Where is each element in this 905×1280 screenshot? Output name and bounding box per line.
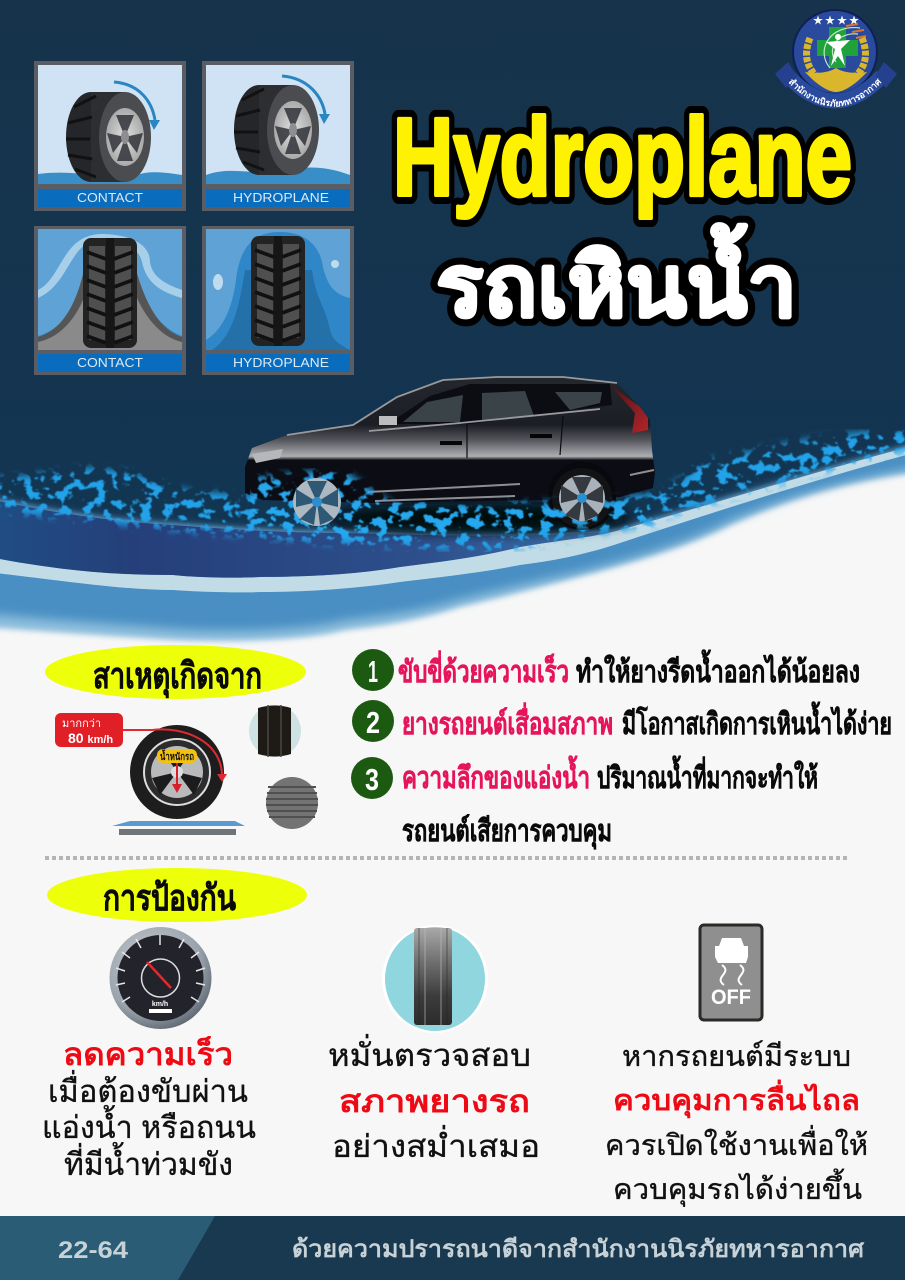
water surface <box>38 172 182 184</box>
lower trim <box>368 470 654 501</box>
icon: new tire tread <box>249 705 301 757</box>
prevention text 1: ที่มีน้ำท่วมขัง <box>64 1142 233 1182</box>
prevention text 3: ควบคุมรถได้ง่ายขึ้น <box>613 1168 862 1207</box>
heading: prevention: การป้องกัน <box>103 877 236 918</box>
navy header background <box>0 0 905 540</box>
prevention text 3: ควรเปิดใช้งานเพื่อให้ <box>605 1125 868 1162</box>
white figure <box>826 34 850 66</box>
car windows <box>403 391 602 422</box>
speed label: มากกว่า <box>62 718 101 730</box>
rear wheel <box>559 475 605 521</box>
water splash spray <box>0 429 905 552</box>
green cross <box>817 27 858 68</box>
icon: traction control off <box>700 925 762 1020</box>
panel: hydroplane side view <box>202 61 354 211</box>
prevention text 3: หากรถยนต์มีระบบ <box>622 1040 851 1073</box>
prevention text 3 <box>605 1040 868 1207</box>
cause 3: ปริมาณน้ำที่มากจะทำให้ <box>597 755 818 795</box>
front fender arch <box>280 474 358 500</box>
footer bar <box>0 1216 905 1280</box>
logo: air force safety center emblem <box>775 9 897 108</box>
rotation arrow <box>282 76 325 114</box>
label: hydroplane <box>206 354 350 372</box>
cause 1: 1 <box>368 654 378 689</box>
water wake layers <box>206 232 350 350</box>
icon: speedometer <box>110 927 212 1029</box>
label: contact <box>38 354 182 372</box>
weight arrow <box>176 763 178 786</box>
wave graphic <box>0 440 905 641</box>
water plate <box>112 821 245 826</box>
cause 1 <box>352 649 860 691</box>
prevention text 1 <box>42 1035 256 1182</box>
rear tyre <box>552 468 612 528</box>
icon: tire speed diagram <box>55 713 245 835</box>
icon: tire on teal <box>382 925 488 1033</box>
car body <box>245 377 655 503</box>
green and white arcs <box>824 28 860 68</box>
panel: contact top view <box>34 226 186 375</box>
label: hydroplane <box>206 189 350 207</box>
rotation arrow <box>114 82 155 120</box>
cause 2 <box>352 700 892 742</box>
prevention text 2: อย่างสม่ำเสมอ <box>332 1125 540 1164</box>
weight label: น้ำหนักรถ <box>160 749 194 763</box>
tire <box>66 92 151 182</box>
prevention text 3: ควบคุมการลื่นไถล <box>613 1079 860 1118</box>
cause 2: ยางรถยนต์เสื่อมสภาพ <box>402 702 613 741</box>
grey road and water wake <box>38 235 182 350</box>
ribbon <box>788 76 882 101</box>
label: contact: CONTACT <box>77 190 143 205</box>
weight label <box>157 749 197 763</box>
cause 1: ขับขี่ด้วยความเร็ว <box>398 650 569 689</box>
label: hydroplane: HYDROPLANE <box>233 355 329 370</box>
title: Thai: รถเหินน้ำ <box>436 223 797 335</box>
rear fender arch <box>548 462 616 530</box>
tire tread <box>251 236 305 346</box>
prevention text 1: ลดความเร็ว <box>63 1035 233 1072</box>
wings <box>805 68 867 92</box>
prevention text 1: เมื่อต้องขับผ่าน <box>48 1070 248 1109</box>
label: hydroplane: HYDROPLANE <box>233 190 329 205</box>
tire tread <box>83 238 137 348</box>
panel: contact side view <box>34 61 186 211</box>
door handles and door lines <box>440 436 552 443</box>
glasshouse <box>388 384 612 424</box>
heading: causes: สาเหตุเกิดจาก <box>93 655 262 699</box>
water splash around wheels <box>250 468 660 538</box>
car <box>245 377 655 530</box>
red streaks <box>846 24 866 38</box>
heading: causes <box>45 645 306 699</box>
panel: hydroplane top view <box>202 226 354 375</box>
issue number: 22-64 <box>58 1237 129 1264</box>
tire <box>234 85 319 175</box>
emblem name: สำนักงานนิรภัยทหารอากาศ <box>788 78 882 107</box>
label: contact <box>38 189 182 207</box>
icon: traction control off: OFF <box>711 986 751 1009</box>
taillight <box>610 385 648 433</box>
heading: prevention <box>47 868 307 922</box>
car roof and window trim <box>287 377 617 435</box>
front wheel <box>293 478 341 526</box>
cause 3 <box>351 755 818 850</box>
prevention text 2: สภาพยางรถ <box>339 1084 530 1119</box>
road shadow under car <box>330 503 630 533</box>
title: Thai: รถเหินน้ำ <box>436 223 797 335</box>
cause 2: 2 <box>366 705 380 740</box>
cause 3: รถยนต์เสียการควบคุม <box>402 814 612 850</box>
icon: worn tire tread <box>266 777 318 829</box>
speed arc <box>123 729 222 776</box>
speed label <box>55 713 123 747</box>
cause 3: 3 <box>365 762 379 797</box>
stars: ★★★★ <box>813 16 861 27</box>
wreath <box>807 38 865 84</box>
prevention text 1: แอ่งน้ำ หรือถนน <box>42 1105 256 1145</box>
prevention text 2 <box>328 1034 540 1164</box>
mirror <box>379 416 397 425</box>
tire <box>130 725 224 819</box>
footer credit: ด้วยความปรารถนาดีจากสำนักงานนิรภัยทหารอากาศ <box>292 1236 865 1263</box>
headlight <box>252 449 283 463</box>
label: contact: CONTACT <box>77 355 143 370</box>
cause 3: ความลึกของแอ่งน้ำ <box>402 755 590 795</box>
prevention text 2: หมั่นตรวจสอบ <box>328 1034 531 1073</box>
icon: speedometer: km/h <box>152 1001 168 1008</box>
speed label: 80 km/h <box>68 730 113 746</box>
water surface <box>206 167 350 184</box>
